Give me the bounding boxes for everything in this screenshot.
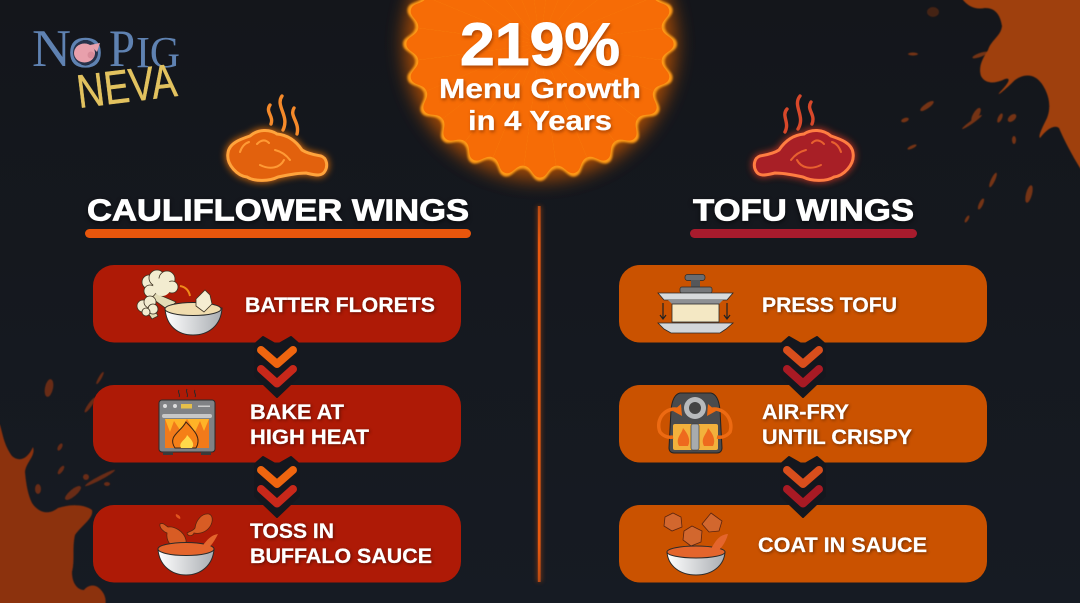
step label: press tofu: PRESS TOFU xyxy=(762,294,897,317)
centre divider xyxy=(536,206,542,582)
icon: wings in sauce bowl xyxy=(158,514,218,575)
badge: 219% menu growth xyxy=(403,0,677,181)
step label: air-fry until crispy xyxy=(762,401,912,449)
icon: air fryer xyxy=(659,393,731,453)
logo: No Pig Neva: P xyxy=(109,20,135,78)
logo: No Pig Neva: IG xyxy=(136,28,180,77)
step label: bake at high heat xyxy=(250,401,369,449)
step label: toss in buffalo sauce xyxy=(250,520,432,568)
step label: batter florets: BATTER FLORETS xyxy=(245,294,435,317)
arrow: air-fry to coat xyxy=(781,457,825,517)
step label: air-fry until crispy: AIR-FRY xyxy=(762,401,849,424)
sauce splatter: bottom left xyxy=(0,371,116,603)
step label: bake at high heat: HIGH HEAT xyxy=(250,426,369,449)
badge: 219% menu growth: Menu Growth xyxy=(439,73,641,104)
heading: tofu wings: TOFU WINGS xyxy=(693,192,914,228)
logo: No Pig Neva: NEVA xyxy=(74,53,180,118)
icon: orange wing xyxy=(228,96,327,180)
icon: red wing xyxy=(754,96,853,180)
heading: cauliflower wings: CAULIFLOWER WINGS xyxy=(87,192,469,228)
arrow: press to air-fry xyxy=(781,337,825,397)
heading: cauliflower wings xyxy=(85,192,471,238)
logo: No Pig Neva xyxy=(32,20,180,118)
icon: oven xyxy=(159,389,215,455)
panel: tofu steps xyxy=(619,265,987,582)
panel: cauliflower steps xyxy=(93,265,461,582)
arrow: batter to bake xyxy=(255,337,299,397)
step label: toss in buffalo sauce: BUFFALO SAUCE xyxy=(250,545,432,568)
icon: tofu cubes in sauce bowl xyxy=(664,513,728,575)
step label: coat in sauce: COAT IN SAUCE xyxy=(758,534,927,557)
step label: toss in buffalo sauce: TOSS IN xyxy=(250,520,334,543)
heading: tofu wings xyxy=(690,192,917,238)
arrow: bake to toss xyxy=(255,457,299,517)
sauce splatter: top right xyxy=(901,0,1080,223)
badge: 219% menu growth: in 4 Years xyxy=(468,105,612,136)
icon: tofu press xyxy=(658,274,733,333)
icon: florets and batter bowl xyxy=(137,270,222,335)
logo: No Pig Neva: N xyxy=(32,20,71,78)
step label: air-fry until crispy: UNTIL CRISPY xyxy=(762,426,912,449)
logo: No Pig Neva: O xyxy=(68,28,103,77)
step label: bake at high heat: BAKE AT xyxy=(250,401,344,424)
badge: 219% menu growth: 219% xyxy=(460,11,620,78)
